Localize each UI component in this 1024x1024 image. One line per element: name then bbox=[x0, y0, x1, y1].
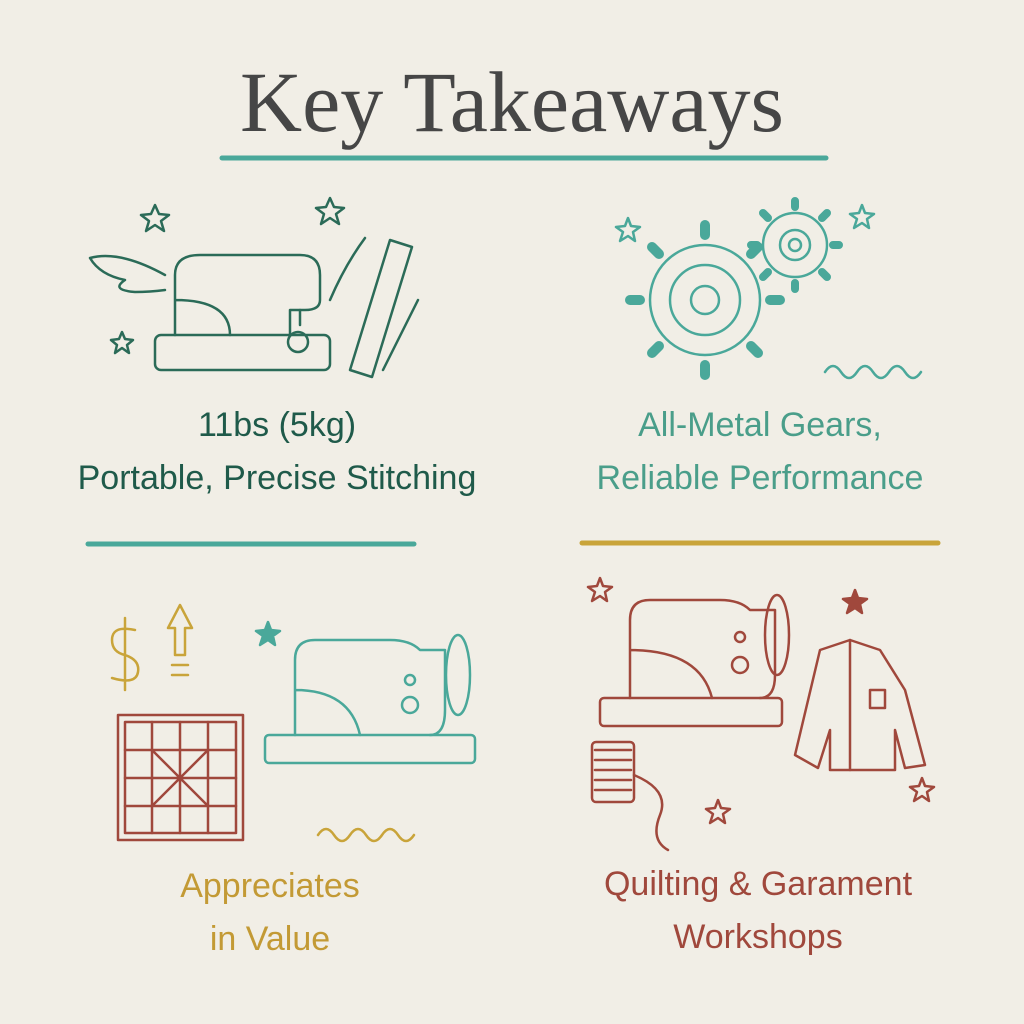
icon: gears bbox=[616, 201, 921, 378]
title: Key Takeaways bbox=[240, 54, 784, 150]
text: portable: 11bs (5kg) bbox=[198, 406, 356, 444]
text: gears bbox=[597, 406, 923, 497]
text: value bbox=[180, 867, 360, 958]
icon: value appreciation bbox=[112, 605, 475, 841]
text: gears: All-Metal Gears, bbox=[638, 406, 882, 444]
text: workshops: Workshops bbox=[673, 918, 843, 956]
text: portable bbox=[78, 406, 476, 497]
dividers bbox=[88, 542, 414, 546]
icon: quilting and garment bbox=[588, 578, 934, 850]
text: portable: Portable, Precise Stitching bbox=[78, 459, 476, 497]
title underline bbox=[222, 156, 826, 160]
text: workshops: Quilting & Garament bbox=[604, 865, 912, 903]
text: workshops bbox=[604, 865, 912, 956]
text: value: Appreciates bbox=[180, 867, 360, 905]
text: gears: Reliable Performance bbox=[597, 459, 923, 497]
text: value: in Value bbox=[210, 920, 330, 958]
icon: winged sewing machine bbox=[90, 198, 418, 377]
